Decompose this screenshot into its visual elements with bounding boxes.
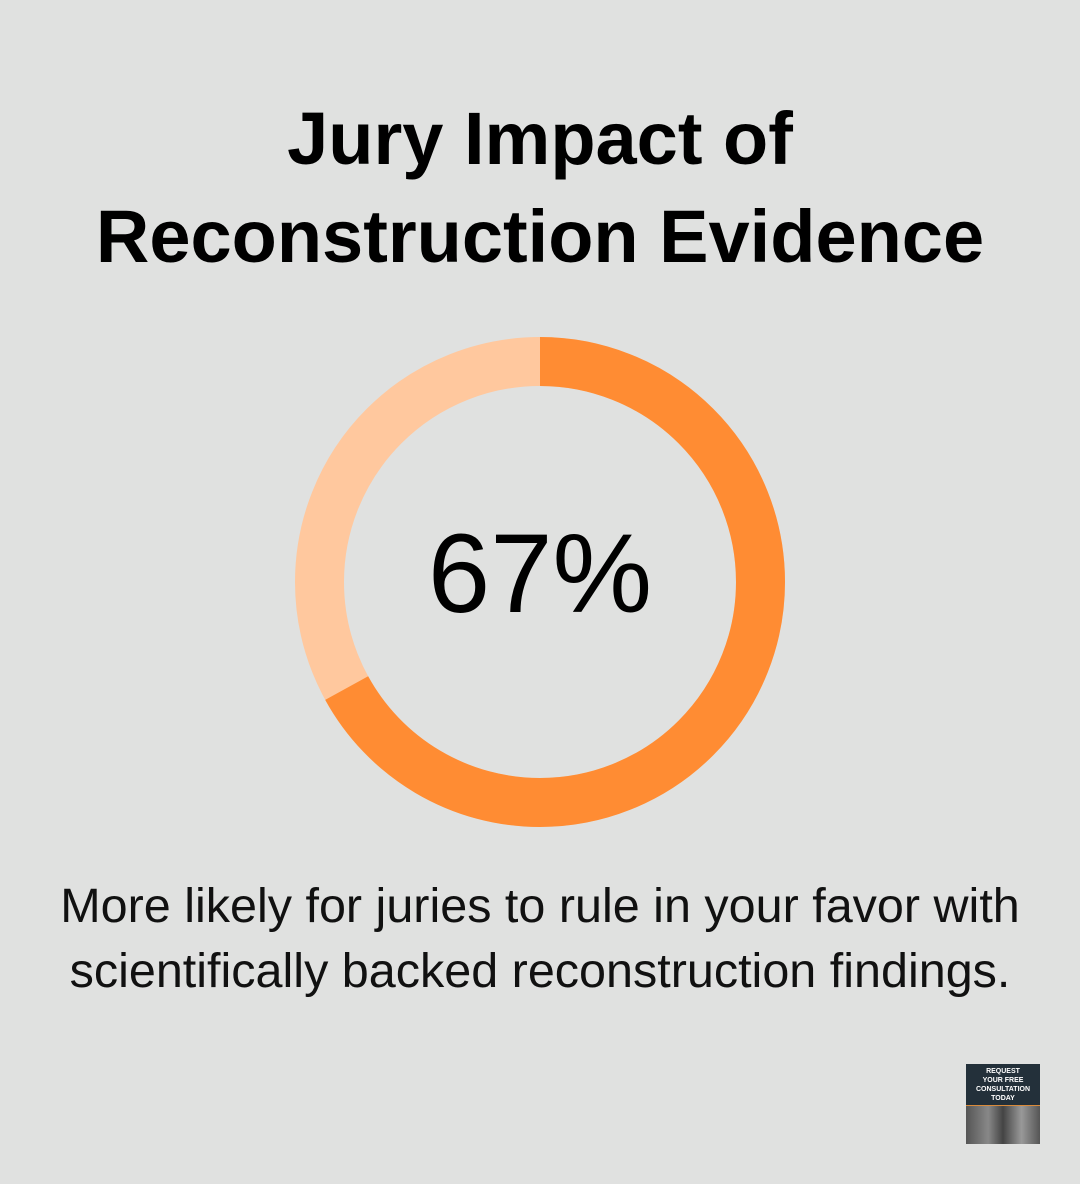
ring background [320, 362, 760, 802]
description [60, 879, 1020, 998]
arc 67% [320, 362, 760, 802]
badge: consultation: YOUR FREE [983, 1077, 1023, 1084]
badge: consultation: CONSULTATION [976, 1086, 1030, 1093]
badge: consultation: REQUEST [986, 1068, 1020, 1075]
title: Jury Impact of [287, 97, 793, 180]
title [96, 97, 984, 278]
badge: consultation: TODAY [991, 1095, 1015, 1102]
description: scientifically backed reconstruction findings. [70, 944, 1010, 998]
badge: consultation [966, 1064, 1040, 1143]
percentage: 67% [428, 511, 652, 636]
title: Reconstruction Evidence [96, 195, 984, 278]
description: More likely for juries to rule in your favor with [60, 879, 1020, 933]
